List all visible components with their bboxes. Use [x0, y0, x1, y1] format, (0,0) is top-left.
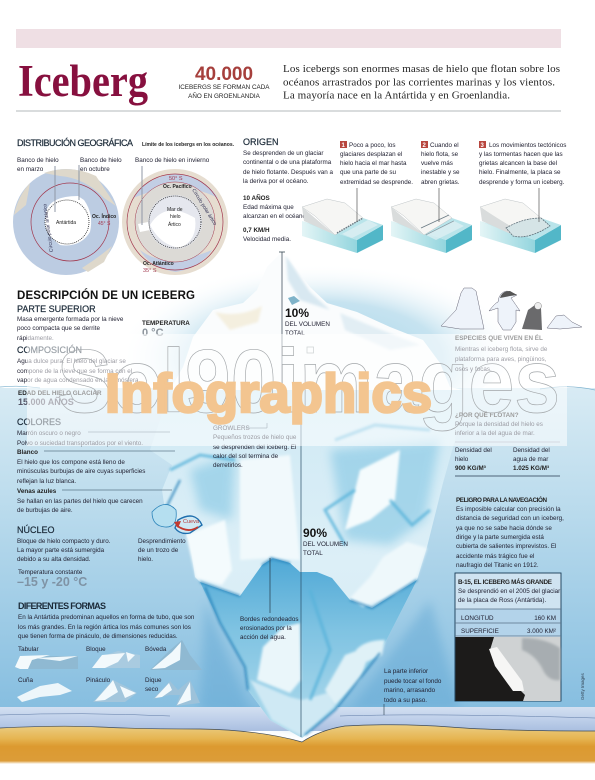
- ocean water: [0, 388, 595, 710]
- text: colores: de burbujas de aire.: [17, 507, 73, 514]
- text: diferentes formas: Bóveda: [145, 646, 167, 653]
- text: diferentes formas: Cuña: [18, 677, 34, 684]
- watermark band: [27, 334, 567, 446]
- text: colores: Venas azules: [17, 488, 57, 495]
- icon: dry dock iceberg: [153, 680, 200, 706]
- globe labels: en octubre: [80, 166, 110, 173]
- label: 90 percent: TOTAL: [303, 550, 323, 557]
- stat: 40.000 icebergs: AÑO EN GROENLANDIA: [188, 91, 261, 100]
- step 2 text: [421, 141, 460, 186]
- text: peligro: Es imposible calcular con precisión la: [456, 506, 561, 513]
- text: por qué flotan: [455, 410, 543, 437]
- text: origen: alcanzan en el océano.: [243, 213, 308, 220]
- whole submerged body: [150, 388, 463, 738]
- chunk breaking off with cueva: Cueva: [183, 519, 200, 525]
- panel: B-15: de la placa de Ross (Antártida).: [458, 597, 546, 604]
- globe: Arctic: Oc. Pacífico: [163, 184, 192, 190]
- globe: Arctic: [122, 169, 228, 275]
- label: 10 percent: TOTAL: [285, 330, 305, 337]
- step 3 text: y las tormentas hacen que las: [479, 151, 563, 158]
- step 2 text: hielo flota, se: [421, 151, 459, 158]
- step 1 text: glaciares desplazan el: [340, 151, 402, 158]
- step 3 text: Los movimientos tectónicos: [489, 142, 566, 149]
- text: temperatura: TEMPERATURA: [142, 320, 190, 327]
- text: bordes: Bordes redondeados: [240, 616, 298, 623]
- text: diferentes formas: Pináculo: [86, 677, 111, 684]
- text: composición: [17, 345, 140, 384]
- text: growlers: derretirlos.: [213, 462, 243, 469]
- label: 10 percent: 10%: [285, 306, 309, 320]
- text: especies: ESPECIES QUE VIVEN EN ÉL: [455, 333, 543, 342]
- text: origen: de hielo flotante. Después van a: [243, 169, 333, 176]
- intro text: océanos arrastrados por las corrientes marinas y los vientos.: [283, 76, 555, 88]
- watermark: orange text: Infographics: [105, 362, 432, 424]
- step 3 text: grietas alcancen la base del: [479, 160, 557, 167]
- text: bordes: acción del agua.: [240, 634, 286, 641]
- density table: [455, 442, 560, 476]
- panel: B-15: 160 KM: [534, 615, 556, 622]
- panel: B-15: LONGITUD: [461, 615, 494, 622]
- globe: Antarctica: Círculo polar antártico: [42, 203, 55, 253]
- heading: distribución geográfica: [17, 138, 235, 148]
- heading: distribución geográfica: DISTRIBUCIÓN GEOGRÁFICA: [17, 138, 133, 148]
- text: parte inferior: La parte inferior: [384, 668, 428, 675]
- text: por qué flotan: ¿POR QUÉ FLOTAN?: [455, 410, 519, 419]
- text: temperatura: [142, 320, 190, 339]
- density table: Densidad del: [513, 447, 550, 454]
- text: parte superior: Masa emergente formada por la nieve: [17, 316, 124, 323]
- iceberg above water: [170, 252, 463, 390]
- label: 10 percent: DEL VOLUMEN: [285, 321, 330, 328]
- step 2 text: 2: [422, 143, 426, 149]
- step 3 text: 3: [480, 143, 484, 149]
- icon: penguin head: [500, 291, 517, 298]
- block diagram 2: [391, 188, 472, 253]
- density table: Densidad del: [455, 447, 492, 454]
- text: growlers: Pequeños trozos de hielo que: [213, 434, 297, 441]
- text: especies: osos y focas.: [455, 366, 492, 373]
- text: diferentes formas: los más grandes. En la región ártica los más comunes son los: [18, 624, 191, 631]
- text: colores: minúsculas burbujas de aire cuyas superficies: [17, 468, 145, 475]
- text: origen: [243, 137, 333, 243]
- globe: Arctic: 50° S: [169, 176, 183, 182]
- block diagram 3: [480, 188, 561, 253]
- icon: wedge iceberg: [17, 683, 72, 702]
- text: especies: Mientras el iceberg flota, sirve de: [455, 346, 548, 353]
- label: 10 percent: [285, 306, 330, 337]
- text: bordes: erosionados por la: [240, 625, 292, 632]
- intro text: Los icebergs son enormes masas de hielo que flotan sobre los: [283, 63, 560, 75]
- icon: tabular iceberg: [15, 655, 78, 669]
- heading: distribución geográfica: Límite de los icebergs en los océanos.: [142, 142, 235, 148]
- chunk breaking off with cueva: [152, 504, 202, 533]
- density table: 900 KG/M³: [455, 465, 486, 472]
- measure line: 10 percent: [279, 252, 285, 410]
- text: diferentes formas: DIFERENTES FORMAS: [18, 601, 106, 611]
- lower cyan mass: [200, 558, 417, 738]
- text: diferentes formas: Tabular: [18, 646, 39, 653]
- heading: descripción: DESCRIPCIÓN DE UN ICEBERG: [17, 289, 195, 302]
- globe labels: Banco de hielo: [80, 157, 122, 164]
- text: especies: plataforma para aves, pingüinos,: [455, 356, 547, 363]
- text: parte inferior: todo a su paso.: [384, 697, 427, 704]
- photo credit: Getty Images: [580, 672, 585, 700]
- panel: B-15: SUPERFICIE: [461, 628, 499, 635]
- text: origen: Edad máxima que: [243, 204, 294, 211]
- step 2 text: vuelve más: [421, 160, 453, 167]
- text: composición: compone de la nieve que se forma con el: [17, 368, 132, 375]
- step 3 text: [479, 141, 566, 186]
- density table: hielo: [455, 456, 469, 463]
- text: parte superior: rápidamente.: [17, 335, 54, 342]
- globe: Arctic: hielo: [170, 214, 181, 220]
- density table: 1.025 KG/M³: [513, 465, 549, 472]
- title: Iceberg: [18, 56, 148, 106]
- text: colores: Blanco: [17, 449, 38, 456]
- text: peligro: PELIGRO PARA LA NAVEGACIÓN: [456, 495, 547, 504]
- text: núcleo: –15 y -20 °C: [17, 575, 87, 589]
- globe: Antarctica: Antártida: [56, 220, 76, 226]
- globe: Arctic: Mar de: [167, 207, 183, 213]
- text: colores: [17, 417, 175, 514]
- watermark: outlined text: Sol90images: [57, 332, 560, 432]
- icon: polar bear: [441, 288, 484, 329]
- label: 90 percent: 90%: [303, 526, 327, 540]
- satellite photo: [456, 637, 560, 701]
- intro text: [283, 63, 560, 102]
- text: desprendimiento: hielo.: [138, 556, 153, 563]
- icons: animals: [441, 288, 582, 330]
- text: parte inferior: [384, 668, 442, 715]
- text: núcleo: Temperatura constante: [18, 569, 83, 576]
- text: colores: reflejan la luz blanca.: [17, 478, 76, 485]
- dark edges: [165, 480, 417, 735]
- step 2 text: abren grietas.: [421, 179, 460, 186]
- text: diferentes formas: [18, 601, 195, 693]
- globe: Arctic: Ártico: [168, 221, 181, 228]
- text: por qué flotan: Porque la densidad del hielo es: [455, 421, 543, 428]
- text: especies: [455, 333, 548, 373]
- panel: B-15: B-15, EL ICEBERG MÁS GRANDE: [458, 577, 552, 586]
- text: diferentes formas: Bloque: [86, 646, 106, 653]
- text: origen: Se desprenden de un glaciar: [243, 150, 324, 157]
- text: origen: 10 AÑOS: [243, 193, 270, 202]
- measure line: 90 percent: [300, 413, 302, 737]
- text: peligro: dirige y la parte sumergida está: [456, 534, 544, 541]
- text: parte inferior: puede tocar el fondo: [384, 678, 442, 685]
- top banner strip: [16, 29, 561, 48]
- text: peligro: distancia de seguridad con un iceberg,: [456, 515, 564, 522]
- label: 90 percent: [303, 526, 348, 557]
- globe: Arctic: Oc. Atlántico: [143, 261, 174, 267]
- text: núcleo: Bloque de hielo compacto y duro.: [17, 538, 111, 545]
- text: núcleo: debido a su alta densidad.: [17, 556, 91, 563]
- panel: B-15: 3.000 KM²: [527, 628, 556, 635]
- block diagram 1: [302, 188, 383, 253]
- text: colores: Se hallan en las partes del hielo que carecen: [17, 498, 143, 505]
- text: origen: la deriva por el océano.: [243, 178, 309, 185]
- label: 90 percent: DEL VOLUMEN: [303, 541, 348, 548]
- text: edad del hielo: 15.000 AÑOS: [18, 397, 74, 407]
- text: growlers: GROWLERS: [213, 425, 250, 432]
- text: parte inferior: marino, arrasando: [384, 687, 436, 694]
- stat: 40.000 icebergs: [179, 64, 270, 100]
- step 1 text: que una parte de su: [340, 169, 397, 176]
- globe labels: [17, 157, 210, 225]
- text: colores: Polvo o suciedad transportados por el viento.: [17, 440, 143, 447]
- stat: 40.000 icebergs: ICEBERGS SE FORMAN CADA: [179, 84, 270, 91]
- text: desprendimiento: [138, 538, 186, 563]
- icon: eagle: [522, 305, 542, 330]
- text: composición: Agua dulce pura. El hielo del glaciar se: [17, 358, 126, 365]
- text: peligro: ya que no se sabe hacia dónde se: [456, 525, 552, 532]
- text: núcleo: La mayor parte está sumergida: [17, 547, 105, 554]
- text: diferentes formas: Dique: [145, 677, 162, 684]
- text: origen: Velocidad media.: [243, 236, 291, 243]
- text: growlers: [213, 423, 297, 469]
- text: núcleo: NÚCLEO: [17, 525, 55, 535]
- step 1 text: extremidad se desprende.: [340, 179, 413, 186]
- deep water shading: [200, 600, 460, 730]
- text: edad del hielo: [18, 390, 102, 407]
- text: colores: COLORES: [17, 417, 61, 427]
- step 3 text: desprende y forma un iceberg.: [479, 179, 565, 186]
- step 3 text: hielo. Finalmente, la placa se: [479, 169, 561, 176]
- text: bordes: [240, 558, 298, 641]
- step 2 text: inestable y se: [421, 169, 460, 176]
- globe labels: Banco de hielo: [17, 157, 59, 164]
- globe: Antarctica: [13, 169, 119, 275]
- icon: penguin: [489, 291, 520, 330]
- icy halo behind iceberg tip: [115, 235, 525, 425]
- cyan streaks: [170, 425, 430, 700]
- step 1 text: hielo hacia el mar hasta: [340, 160, 407, 167]
- step 1 text: [340, 141, 413, 186]
- iceberg underwater: [150, 388, 463, 738]
- text: edad del hielo: EDAD DEL HIELO GLACIAR: [18, 390, 102, 397]
- text: growlers: calor del sol termina de: [213, 453, 279, 460]
- globe: Antarctica: Oc. Índico: [92, 212, 116, 220]
- icon: dome iceberg: [150, 640, 202, 670]
- seabed and sand: [0, 707, 595, 764]
- text: desprendimiento: Desprendimiento: [138, 538, 186, 545]
- text: colores: Marrón oscuro o negro: [17, 430, 81, 437]
- icon: block iceberg: [92, 651, 140, 668]
- text: diferentes formas: que tienen forma de pináculo, de dimensiones reducidas.: [18, 633, 178, 640]
- text: parte superior: [17, 304, 124, 342]
- text: peligro: naufragio del Titanic en 1912.: [456, 562, 539, 569]
- text: origen: ORIGEN: [243, 137, 279, 147]
- text: origen: 0,7 KM/H: [243, 227, 270, 234]
- text: desprendimiento: de un trozo de: [138, 547, 179, 554]
- text: temperatura: 0 °C: [142, 327, 164, 339]
- pale ledges: [186, 450, 427, 736]
- text: diferentes formas: seco: [145, 686, 159, 693]
- panel: B-15: Se desprendió en el 2005 del glaciar: [458, 588, 560, 595]
- text: parte superior: poco compacta que se derrite: [17, 325, 100, 332]
- text: parte superior: PARTE SUPERIOR: [17, 304, 96, 314]
- icon: eagle head: [534, 302, 542, 310]
- text: origen: continental o de una plataforma: [243, 159, 332, 166]
- intro text: La mayoría nace en la Antártida y en Groenlandia.: [283, 90, 510, 102]
- text: composición: COMPOSICIÓN: [17, 345, 82, 355]
- panel: B-15: [455, 573, 561, 701]
- globe: Arctic: Círculo polar ártico: [190, 188, 218, 227]
- icon: seal: [547, 315, 582, 329]
- density table: agua de mar: [513, 456, 548, 463]
- globe labels: Banco de hielo en invierno: [135, 157, 210, 164]
- soft cyan wash on upper mass: [190, 440, 440, 545]
- text: por qué flotan: inferior a la del agua de mar.: [455, 430, 535, 437]
- stat: 40.000 icebergs: 40.000: [195, 64, 253, 85]
- text: colores: El hielo que los compone está lleno de: [17, 459, 125, 466]
- text: peligro: accidente más trágico fue el: [456, 553, 534, 560]
- step 1 text: 1: [342, 143, 346, 149]
- text: peligro: cubierta de salientes imprevistos. El: [456, 543, 556, 550]
- globe labels: en marzo: [17, 166, 44, 173]
- text: peligro: [456, 495, 564, 569]
- text: diferentes formas: En la Antártida predominan aquellos en forma de tubo, que son: [18, 614, 195, 621]
- icon: pinnacle iceberg: [93, 680, 137, 702]
- text: núcleo: [17, 525, 111, 589]
- text: composición: vapor de agua condensado en la atmósfera.: [17, 377, 140, 384]
- globe: Arctic: 35° S: [143, 268, 157, 274]
- text: growlers: se desprenden del iceberg. El: [213, 444, 296, 451]
- step 2 text: Cuando el: [430, 142, 459, 149]
- step 1 text: Poco a poco, los: [349, 142, 396, 149]
- globe: Antarctica: 45° S: [98, 221, 111, 227]
